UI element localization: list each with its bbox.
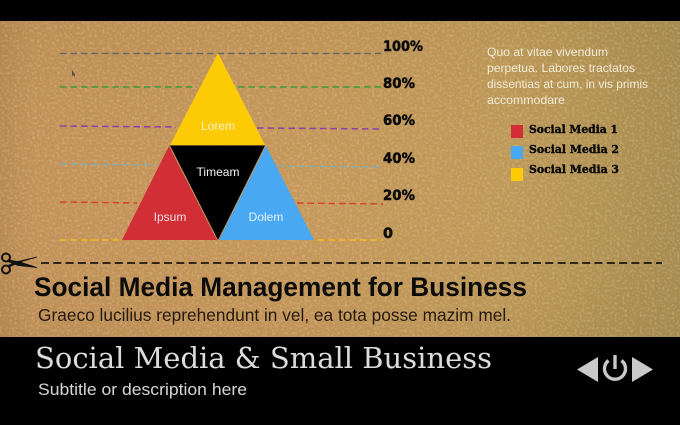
triangle: Ipsum xyxy=(122,146,217,240)
triangle: Lorem: Lorem xyxy=(201,119,235,133)
triangle: Dolem xyxy=(219,146,314,240)
triangle: Timeam: Timeam xyxy=(197,165,239,179)
text block: description xyxy=(487,45,648,107)
axis label: 40%: 40% xyxy=(383,151,415,167)
text block: description: Quo at vitae vivendum xyxy=(487,45,608,59)
top black bar xyxy=(0,0,680,21)
legend item: Social Media 2: Social Media 2 xyxy=(529,142,619,156)
navigation controls xyxy=(577,355,653,382)
footer title: Social Media & Small Business xyxy=(35,341,492,375)
icon: scissors xyxy=(2,254,37,274)
triangle: Ipsum: Ipsum xyxy=(154,210,186,224)
chart: triangle level chart xyxy=(60,39,423,242)
text block: description: dissentias at cum, in vis primis xyxy=(487,77,648,91)
legend item: Social Media 1: Social Media 1 xyxy=(529,122,618,136)
panel: footer bar xyxy=(0,337,680,425)
axis label: 100%: 100% xyxy=(383,39,423,55)
icon: power button xyxy=(604,355,626,379)
footer subtitle: Subtitle or description here xyxy=(38,380,247,399)
axis label: 60%: 60% xyxy=(383,113,415,129)
icon: mouse cursor xyxy=(72,70,75,77)
subheading: Graeco lucilius reprehendunt in vel, ea tota posse mazim mel. xyxy=(38,305,511,325)
text block: description: perpetua. Labores tractatos xyxy=(487,61,635,75)
heading: Social Media Management for Business xyxy=(34,272,527,302)
cut line xyxy=(41,262,662,264)
icon: previous arrow xyxy=(577,357,598,382)
triangle: Dolem: Dolem xyxy=(249,210,283,224)
text block: description: accommodare xyxy=(487,93,565,107)
triangle: Timeam xyxy=(170,146,265,240)
level guide lines xyxy=(60,54,383,240)
axis label: 20%: 20% xyxy=(383,188,415,204)
triangle: Lorem xyxy=(170,53,265,145)
legend item: Social Media 3: Social Media 3 xyxy=(529,162,619,176)
icon: next arrow xyxy=(632,357,653,382)
legend xyxy=(511,122,619,181)
axis label: 80%: 80% xyxy=(383,76,415,92)
panel: cardboard background xyxy=(0,21,680,337)
axis label: 0: 0 xyxy=(383,226,393,242)
